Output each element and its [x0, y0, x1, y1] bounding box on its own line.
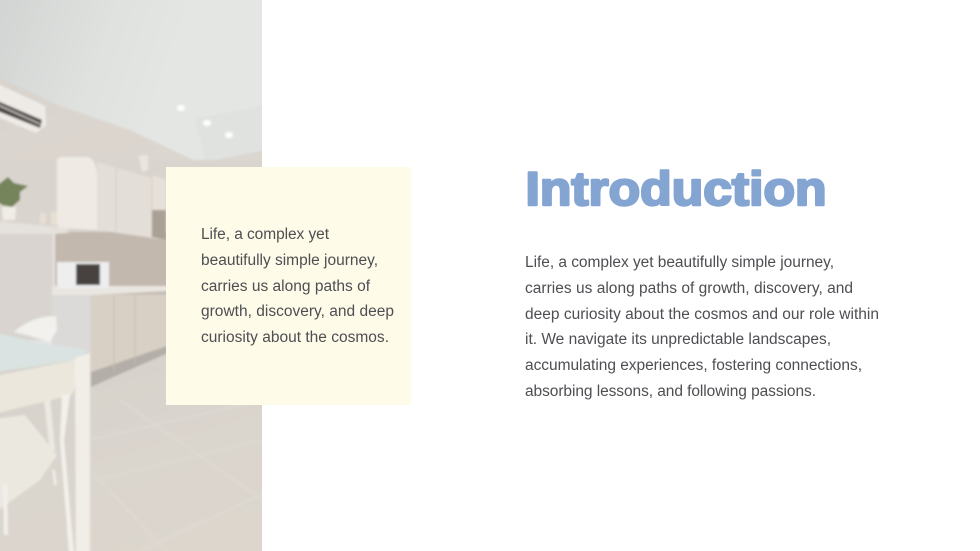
body text: deep curiosity about the cosmos and our role within — [525, 306, 879, 323]
card text: curiosity about the cosmos. — [201, 329, 389, 346]
card text: growth, discovery, and deep — [201, 303, 394, 320]
body text: carries us along paths of growth, discovery, and — [525, 280, 853, 297]
body text: it. We navigate its unpredictable landscapes, — [525, 331, 831, 348]
table and front chair — [0, 334, 84, 372]
body text: Life, a complex yet beautifully simple journey, — [525, 254, 834, 271]
body text: absorbing lessons, and following passions. — [525, 383, 816, 400]
body text: accumulating experiences, fostering connections, — [525, 357, 862, 374]
back chair — [14, 316, 57, 342]
panel: cream card — [166, 167, 411, 405]
floor — [0, 356, 262, 551]
microwave — [57, 262, 109, 288]
lower wall and counter — [53, 296, 90, 354]
body text — [525, 254, 879, 400]
card text: Life, a complex yet — [201, 226, 330, 243]
air conditioner — [0, 84, 46, 133]
card text: beautifully simple journey, — [201, 252, 378, 269]
ceiling lights — [177, 105, 233, 138]
photo: kitchen interior — [0, 0, 280, 551]
card text: carries us along paths of — [201, 278, 371, 295]
upper cabinets — [98, 164, 158, 239]
shelf and plant — [0, 222, 68, 234]
title: Introduction — [526, 162, 826, 215]
card text — [201, 226, 394, 346]
